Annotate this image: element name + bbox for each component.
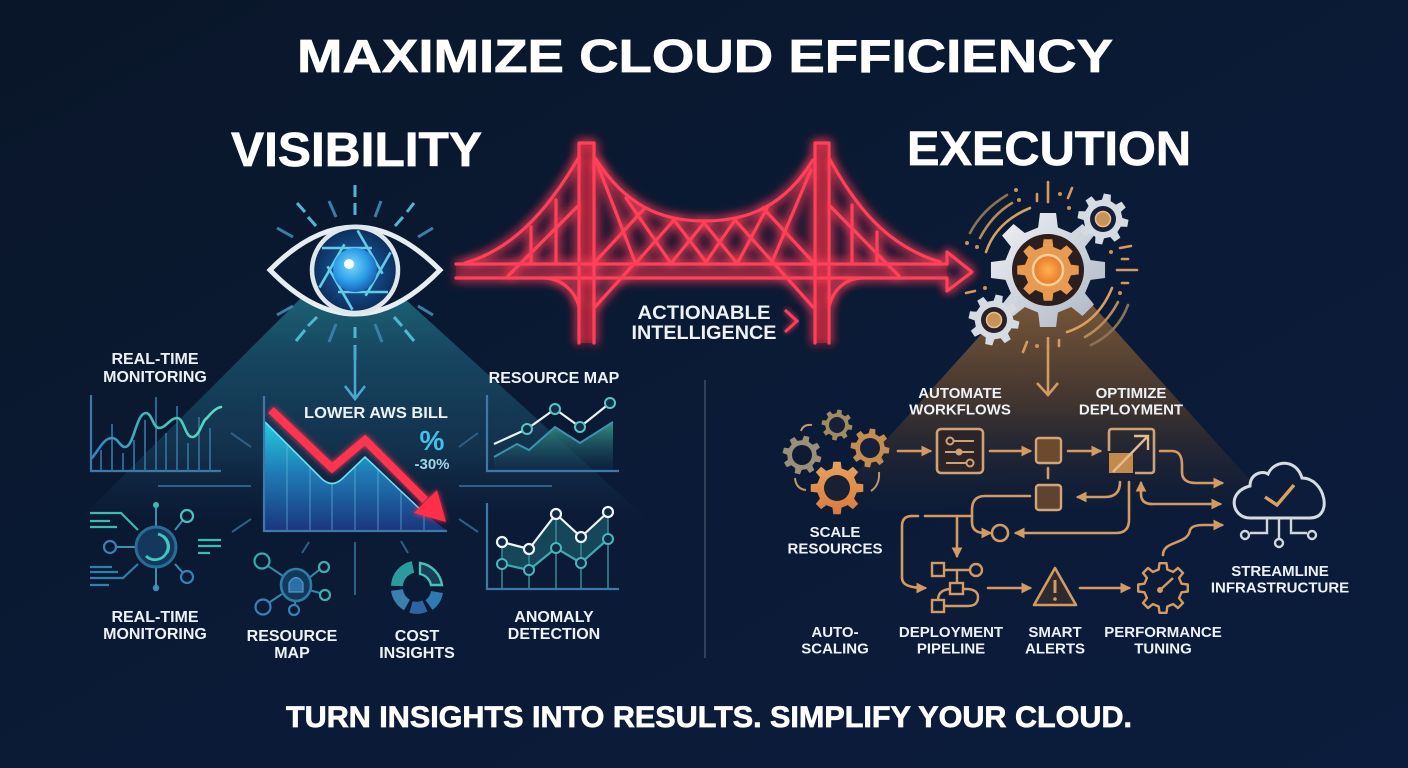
- label: auto-scaling: AUTO-: [811, 624, 859, 641]
- label: automate workflows: AUTOMATE: [918, 385, 1002, 402]
- neon bridge arrow: [456, 143, 972, 343]
- tagline: TURN INSIGHTS INTO RESULTS. SIMPLIFY YOUR CLOUD.: [286, 701, 1132, 734]
- label: actionable intelligence: [632, 303, 797, 344]
- main chart: lower AWS bill: [264, 396, 450, 531]
- heading: visibility: VISIBILITY: [231, 124, 482, 177]
- left light beam: [79, 249, 648, 520]
- icon: square node lower: [1036, 485, 1061, 510]
- gear: main silver: [991, 213, 1105, 327]
- label: anomaly detection: DETECTION: [508, 626, 600, 643]
- line chart: anomaly detection: [487, 503, 619, 589]
- area chart: resource map: [487, 395, 619, 471]
- label: real-time monitoring bottom: MONITORING: [103, 626, 207, 643]
- label: smart alerts: ALERTS: [1025, 640, 1085, 658]
- label: cost insights: COST: [395, 628, 439, 645]
- label: actionable intelligence: ACTIONABLE: [638, 303, 770, 324]
- icon: scale resources gears: [779, 407, 892, 514]
- main chart: lower AWS bill: -30%: [414, 456, 450, 473]
- label: deployment pipeline: PIPELINE: [917, 640, 985, 658]
- label: real-time monitoring top: MONITORING: [103, 369, 207, 386]
- icon: main gear cluster: [964, 182, 1137, 352]
- label: anomaly detection: ANOMALY: [514, 609, 594, 626]
- arrow: gears to workflow: [1037, 345, 1058, 395]
- label: performance tuning: PERFORMANCE: [1104, 624, 1222, 641]
- line chart: real-time monitoring: [91, 395, 221, 471]
- icon: cost insights donut: [397, 563, 442, 608]
- label: scale resources: RESOURCES: [787, 540, 883, 558]
- label: real-time monitoring top: REAL-TIME: [111, 351, 199, 368]
- icon: resource map network: [254, 554, 330, 615]
- label: optimize deployment: OPTIMIZE: [1096, 385, 1166, 402]
- icon: circle node: [992, 525, 1008, 541]
- title: MAXIMIZE CLOUD EFFICIENCY: [297, 30, 1113, 82]
- heading: execution: EXECUTION: [907, 123, 1191, 176]
- icon: performance tuning gear: [1138, 563, 1188, 613]
- label: resource map: MAP: [274, 645, 310, 662]
- icon: deployment pipeline: [932, 563, 982, 612]
- icon: streamline cloud: [1234, 463, 1324, 547]
- label: scale resources: SCALE: [810, 524, 860, 541]
- icon: optimize deployment box: [1109, 429, 1154, 473]
- icon: eye: [270, 185, 440, 360]
- label: auto-scaling: SCALING: [801, 640, 869, 658]
- spokes around main chart: [158, 433, 552, 595]
- main chart: lower AWS bill: LOWER AWS BILL: [304, 405, 448, 422]
- main chart: lower AWS bill: %: [420, 425, 445, 456]
- label: actionable intelligence: INTELLIGENCE: [632, 322, 776, 344]
- icon: monitoring network: [90, 502, 221, 591]
- label: smart alerts: SMART: [1028, 624, 1082, 641]
- label: real-time monitoring bottom: REAL-TIME: [111, 609, 199, 626]
- arrow: eye to chart: [345, 346, 365, 399]
- label: automate workflows: WORKFLOWS: [909, 402, 1011, 418]
- label: streamline infrastructure: STREAMLINE: [1231, 563, 1329, 580]
- label: optimize deployment: DEPLOYMENT: [1079, 402, 1183, 418]
- workflow arrows: [898, 451, 1222, 588]
- gear: top right: [1074, 190, 1132, 248]
- label: resource map top: RESOURCE MAP: [489, 370, 620, 387]
- right light beam: [823, 258, 1277, 510]
- icon: square node upper: [1036, 438, 1061, 463]
- label: streamline infrastructure: INFRASTRUCTURE: [1211, 580, 1349, 596]
- icon: smart alerts: [1034, 568, 1076, 605]
- label: cost insights: INSIGHTS: [379, 645, 455, 662]
- label: deployment pipeline: DEPLOYMENT: [899, 624, 1003, 641]
- center divider: [704, 380, 706, 658]
- label: performance tuning: TUNING: [1134, 640, 1192, 658]
- gear: bottom left: [964, 290, 1024, 350]
- icon: workflow sliders box: [937, 429, 983, 473]
- label: resource map: RESOURCE: [247, 628, 338, 645]
